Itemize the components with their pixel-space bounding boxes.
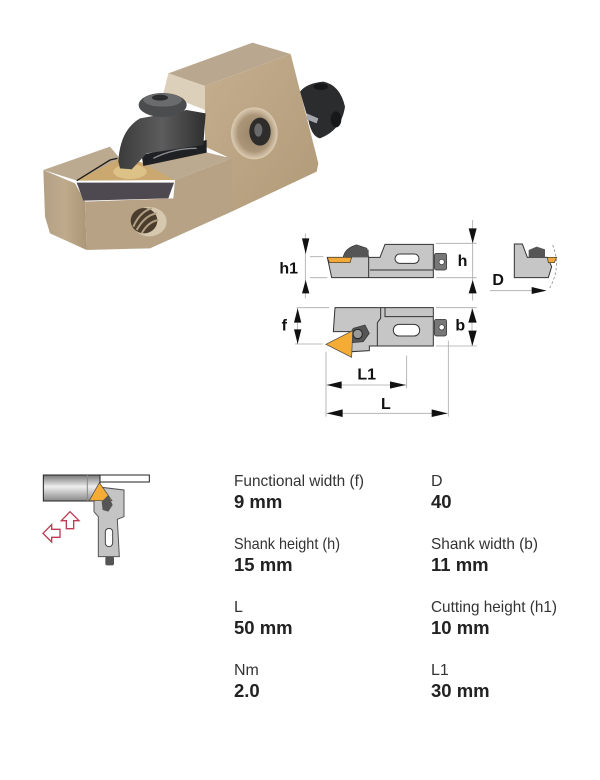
carbide insert bbox=[77, 158, 174, 201]
label: D: D bbox=[492, 272, 504, 289]
spec: Nm: 2.0 bbox=[234, 680, 260, 701]
label: L1: L1 bbox=[357, 366, 376, 383]
spec: D: D bbox=[431, 473, 443, 490]
spec: L: 50 mm bbox=[234, 617, 293, 638]
spec: cutting height: Cutting height (h1) bbox=[431, 599, 557, 616]
spec: Nm: Nm bbox=[234, 662, 259, 679]
spec: shank width bbox=[431, 536, 538, 575]
spec: D bbox=[431, 473, 452, 512]
label: b: b bbox=[455, 318, 465, 335]
spec: cutting height: 10 mm bbox=[431, 617, 490, 638]
knurled screw at rear bbox=[300, 82, 345, 138]
product photo: tool holder bbox=[43, 43, 345, 250]
spec: L1: L1 bbox=[431, 662, 449, 679]
clamp and screw bbox=[118, 93, 207, 169]
label: L: L bbox=[381, 396, 391, 413]
machining diagram bbox=[43, 475, 149, 565]
lower body block bbox=[43, 147, 232, 250]
specifications: right column bbox=[431, 473, 557, 701]
label: f: f bbox=[282, 318, 288, 335]
side view bbox=[327, 244, 447, 278]
spec: L: L bbox=[234, 599, 243, 616]
spec: shank height bbox=[234, 536, 340, 575]
upper body block bbox=[163, 43, 318, 212]
spec: shank height: 15 mm bbox=[234, 554, 293, 575]
spec: L1 bbox=[431, 662, 490, 701]
spec: D: 40 bbox=[431, 491, 452, 512]
specifications: left column bbox=[234, 473, 364, 701]
workpiece bar bbox=[43, 475, 149, 501]
tool bbox=[89, 483, 124, 565]
label: h: h bbox=[458, 253, 467, 270]
top view bbox=[326, 308, 447, 357]
spec: L bbox=[234, 599, 293, 638]
spec: functional width: 9 mm bbox=[234, 491, 282, 512]
spec: L1: 30 mm bbox=[431, 680, 490, 701]
dimension lines bbox=[295, 220, 533, 417]
end view bbox=[514, 244, 557, 289]
feed arrows bbox=[43, 512, 79, 542]
dimension arrowheads bbox=[294, 228, 547, 417]
spec: shank width: Shank width (b) bbox=[431, 536, 538, 553]
spec: functional width: Functional width (f) bbox=[234, 473, 364, 490]
technical drawing: dimensions bbox=[279, 220, 557, 417]
spec: Nm bbox=[234, 662, 260, 701]
spec: functional width bbox=[234, 473, 364, 512]
spec: shank height: Shank height (h) bbox=[234, 536, 340, 553]
spec: shank width: 11 mm bbox=[431, 554, 489, 575]
spec: cutting height bbox=[431, 599, 557, 638]
label: h1: h1 bbox=[279, 260, 298, 277]
